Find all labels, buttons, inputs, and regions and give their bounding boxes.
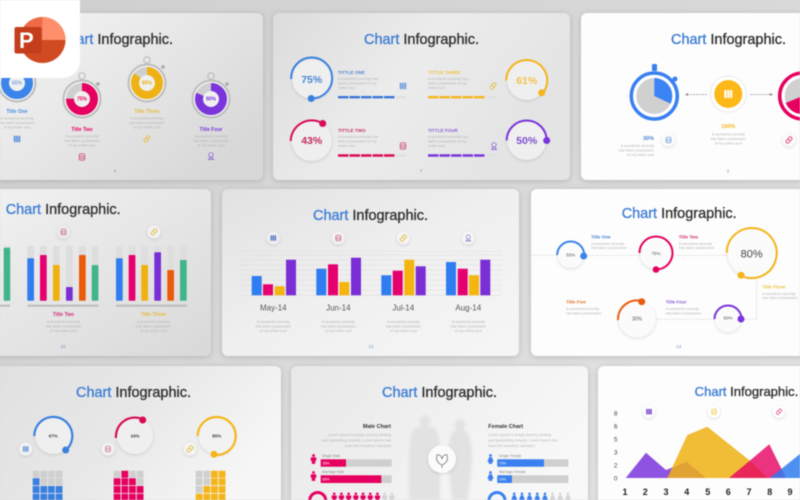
month descriptions: A wonderful serenity <box>257 320 290 324</box>
x axis labels: 5 <box>705 487 710 497</box>
bar group: title two <box>27 246 98 307</box>
ring 43%: 43% <box>301 135 323 147</box>
y axis labels: 2 <box>614 462 618 470</box>
month labels: Jul-14 <box>392 304 415 312</box>
female bars: Single Female <box>499 454 521 458</box>
month descriptions: of my entire soul <box>325 329 352 333</box>
stopwatch: title one <box>0 64 36 142</box>
month descriptions: of my entire soul <box>455 329 482 333</box>
male bottom ring and people row <box>310 492 394 500</box>
caption 100%: has taken possession <box>711 137 746 141</box>
caption 100%: 100% <box>721 124 735 130</box>
item: tittle two <box>338 128 406 156</box>
ring 50% <box>507 120 550 160</box>
month descriptions: A wonderful serenity <box>452 320 485 324</box>
item: tittle one: taken possession of my <box>338 82 377 86</box>
stopwatch: title two: has taken possession <box>64 139 100 143</box>
stopwatch: title three: of my entire soul <box>133 126 161 130</box>
heading: Chart Infographic. <box>382 385 497 401</box>
x axis labels: 3 <box>663 487 669 497</box>
panel: rings and waffle slide <box>0 366 281 500</box>
caption: title two: Title Two <box>53 312 74 318</box>
panel: timeline rings slide <box>531 189 800 356</box>
stopwatch: title two: 75% <box>77 97 88 103</box>
ring 75% <box>291 58 332 102</box>
caption: title two <box>46 312 81 333</box>
y axis labels: 5 <box>614 436 618 444</box>
icon badges <box>643 406 785 418</box>
caption 30%: of my entire soul <box>627 153 654 157</box>
stopwatch: title three: 85% <box>142 81 153 87</box>
x axis labels <box>622 487 793 497</box>
bar group: cut off left <box>0 246 10 307</box>
x axis labels: 1 <box>622 487 628 497</box>
icon: powerpoint logo: P <box>19 28 34 53</box>
stopwatch: title three: Title Three <box>134 109 160 115</box>
month descriptions: has taken possession <box>256 324 291 328</box>
item: tittle four: entire soul <box>428 144 445 148</box>
male bars: Single Male <box>322 454 340 458</box>
ring 50% top <box>557 242 587 268</box>
x axis labels: 8 <box>767 487 772 497</box>
stopwatch: title four: 90% <box>206 97 217 103</box>
ring 30% <box>618 298 656 338</box>
item: tittle two: entire soul <box>338 144 355 148</box>
caption: title two: of my entire soul <box>50 329 77 333</box>
waffle chart yellow <box>196 471 226 500</box>
heading: Chart Infographic. <box>622 206 737 222</box>
bar group: title three <box>116 246 187 307</box>
panel: male female chart slide <box>291 366 588 500</box>
caption 30% <box>619 136 654 157</box>
month descriptions: has taken possession <box>386 324 421 328</box>
female column text <box>488 424 558 448</box>
female bars: 15% <box>499 478 506 482</box>
waffle chart blue <box>33 471 62 500</box>
caption: title three: A wonderful serenity <box>137 320 170 324</box>
label: title one: A wonderful serenity <box>591 242 624 246</box>
ring 67%: 67% <box>49 434 58 439</box>
label: title four: has taken possession <box>666 312 701 316</box>
ring 34% <box>116 416 153 454</box>
x axis labels: 4 <box>684 487 689 497</box>
icon badges <box>19 442 197 456</box>
icon: pencil badge <box>148 226 160 238</box>
waffle chart pink <box>114 471 144 500</box>
male bars: 85% <box>322 478 330 482</box>
x axis labels: 9 <box>787 487 793 497</box>
stopwatch: title one: Title One <box>6 109 28 115</box>
y axis labels: 3 <box>614 450 618 456</box>
item: tittle four: TITTLE FOUR <box>428 128 459 133</box>
male bars: 35% <box>322 462 330 466</box>
male bars <box>311 454 392 483</box>
label: title five <box>566 300 601 316</box>
panel: vertical bars slide <box>0 189 211 356</box>
y axis labels: 0 <box>614 476 618 482</box>
item: tittle one: entire soul <box>338 86 355 90</box>
caption 30%: A wonderful serenity <box>621 144 654 148</box>
item: tittle two: TITTLE TWO <box>338 128 366 133</box>
page number: 14 <box>676 344 682 349</box>
y axis labels <box>614 410 618 482</box>
label: title three: Title Three <box>762 284 786 290</box>
label: title two: has taken possession <box>679 246 714 250</box>
month descriptions: A wonderful serenity <box>322 320 355 324</box>
label: title four: A wonderful serenity <box>666 307 699 311</box>
month descriptions: has taken possession <box>451 324 486 328</box>
stopwatch: title one: has taken possession <box>0 121 35 125</box>
stopwatch: title four: has taken possession <box>193 139 229 143</box>
month labels: Jun-14 <box>326 304 351 312</box>
item: tittle four: taken possession of my <box>428 140 467 144</box>
female bars: Marriage Female <box>499 470 526 474</box>
male column text: been the industry's standard <box>345 444 391 448</box>
stopwatch: title one: A wonderful serenity <box>0 116 34 120</box>
stopwatch: title two <box>64 73 100 160</box>
caption: title two: has taken possession <box>46 324 81 328</box>
label: title one: Title One <box>591 234 611 240</box>
panel: progress rings slide <box>273 13 570 180</box>
center badge <box>428 445 456 473</box>
ring 30%: 30% <box>632 316 643 322</box>
icon: pencil <box>782 134 796 146</box>
item: tittle four <box>428 128 497 156</box>
label: title three: A wonderful serenity <box>762 292 796 296</box>
caption: title three: Title Three <box>141 312 166 318</box>
page number: 7 <box>420 168 423 174</box>
stopwatch: title two: A wonderful serenity <box>65 134 99 138</box>
label: title four: Title Four <box>666 300 687 304</box>
month labels: May-14 <box>260 304 287 312</box>
heading: Chart Infographic. <box>671 32 786 48</box>
stopwatch: title two: Title Two <box>71 127 93 133</box>
month labels: Aug-14 <box>455 304 482 312</box>
label: title five: A wonderful serenity <box>566 307 599 311</box>
icon: database <box>662 134 675 146</box>
item: tittle three <box>428 70 497 97</box>
ring 34%: 34% <box>130 434 140 439</box>
ring 43% <box>291 120 332 161</box>
label: title five: has taken possession <box>566 312 601 316</box>
ring 85%: 85% <box>212 434 221 439</box>
month descriptions: of my entire soul <box>260 329 287 333</box>
male column text: Lorem Ipsum is simply dummy printing <box>328 433 391 437</box>
caption: title two: A wonderful serenity <box>47 320 80 324</box>
female bars: 70% <box>499 462 506 466</box>
stopwatch: title three: A wonderful serenity <box>130 116 164 120</box>
caption 100%: of my entire soul <box>715 142 742 146</box>
heading: Chart Infographic. <box>313 208 428 224</box>
caption: title three <box>136 312 171 333</box>
ring 50% bottom: 50% <box>723 316 733 320</box>
item: tittle two: A wonderful serenity has <box>338 135 378 139</box>
ring 67% <box>34 417 72 454</box>
ring 75% <box>640 237 672 273</box>
ring 61% <box>506 60 547 100</box>
stopwatch: title one: of my entire soul <box>3 126 31 130</box>
item: tittle three: taken possession of my <box>428 82 467 86</box>
label: title five: Title Five <box>566 300 586 304</box>
label: title three: has taken possession <box>762 296 798 300</box>
ring 80% <box>727 228 777 279</box>
x axis labels: 2 <box>643 487 648 497</box>
y axis labels: 8 <box>614 410 618 418</box>
panel: monthly bar chart slide <box>222 189 519 356</box>
x axis labels: 7 <box>746 487 752 497</box>
panel: timer pie slide <box>581 13 800 180</box>
silhouettes of man and woman <box>409 416 472 500</box>
label: title one: has taken possession <box>591 246 626 250</box>
heading: Chart Infographic. <box>364 32 479 48</box>
female column text: and typesetting industry. Lorem Ipsum has <box>488 438 558 442</box>
caption 30%: 30% <box>643 136 654 142</box>
center dial 100% <box>710 76 746 112</box>
heading: Chart Infographic. <box>695 384 798 399</box>
icon badges <box>267 232 475 244</box>
female bars <box>487 454 568 483</box>
stopwatch: title four: A wonderful serenity <box>194 134 228 138</box>
item: tittle three: entire soul <box>428 86 445 90</box>
month descriptions: A wonderful serenity <box>387 320 420 324</box>
page number: 12 <box>368 344 374 349</box>
heading: Chart Infographic. <box>6 202 121 218</box>
dashed arrow left <box>685 93 708 96</box>
dashed arrow right <box>750 93 773 96</box>
y axis labels: 6 <box>614 424 618 430</box>
female column text: Female Chart <box>488 424 523 430</box>
page number: 10 <box>60 344 66 349</box>
stopwatch: title three: has taken possession <box>129 121 165 125</box>
item: tittle three: TITTLE THREE <box>428 70 460 75</box>
item: tittle one: TITTLE ONE <box>338 70 365 75</box>
stopwatch: title one: 65% <box>12 81 23 87</box>
month labels <box>260 304 482 312</box>
icon: database badge <box>57 226 70 238</box>
male bars: Marriage Male <box>322 470 344 474</box>
caption: title three: has taken possession <box>136 324 171 328</box>
male column text <box>322 424 391 448</box>
item: tittle two: taken possession of my <box>338 140 377 144</box>
connector lines <box>531 255 757 319</box>
area chart <box>626 427 800 478</box>
female bottom ring and people row <box>489 492 571 500</box>
caption 100% <box>711 124 746 146</box>
male column text: and typesetting industry. Lorem Ipsum has <box>322 438 391 442</box>
item: tittle four: A wonderful serenity has <box>428 135 468 139</box>
timer: pink <box>780 73 800 119</box>
caption: title three: of my entire soul <box>140 329 167 333</box>
item: tittle one <box>338 70 406 97</box>
item: tittle one: A wonderful serenity has <box>338 77 378 81</box>
ring 75%: 75% <box>301 74 323 86</box>
x axis labels: 6 <box>726 487 731 497</box>
month descriptions <box>256 320 486 333</box>
month descriptions: of my entire soul <box>390 329 417 333</box>
male column text: Male Chart <box>363 424 391 430</box>
page number: 2 <box>727 168 730 174</box>
stopwatch: title three <box>128 57 166 143</box>
heading: Chart Infographic. <box>58 32 173 48</box>
ring 50%: 50% <box>516 135 538 147</box>
label: title two <box>679 234 714 250</box>
label: title one <box>591 234 626 250</box>
female column text: been the industry's standard <box>488 444 535 448</box>
bar chart <box>240 252 502 295</box>
ring 50% top: 50% <box>566 252 575 258</box>
ring 85% <box>198 417 236 458</box>
caption 100%: A wonderful serenity <box>712 132 745 136</box>
label: title two: Title Two <box>679 234 698 240</box>
timer: blue 30% <box>631 64 678 119</box>
item: tittle three: A wonderful serenity has <box>428 77 468 81</box>
month descriptions: has taken possession <box>321 324 356 328</box>
ring 80%: 80% <box>741 248 763 260</box>
panel: stopwatch slide <box>0 13 263 180</box>
stopwatch: title four: of my entire soul <box>197 144 225 148</box>
stopwatch: title two: of my entire soul <box>68 144 96 148</box>
caption 30%: has taken possession <box>619 148 654 152</box>
page number: 4 <box>114 168 117 174</box>
ring 61%: 61% <box>516 75 538 87</box>
powerpoint logo badge <box>0 0 80 78</box>
stopwatch: title four: Title Four <box>200 127 222 133</box>
panel: area chart slide <box>598 366 800 500</box>
label: title two: A wonderful serenity <box>679 242 712 246</box>
label: title four <box>666 300 701 316</box>
label: title three <box>762 284 798 300</box>
stopwatch: title four <box>192 73 230 159</box>
ring 75%: 75% <box>651 251 661 256</box>
ring 50% bottom <box>714 306 744 332</box>
heading: Chart Infographic. <box>76 385 191 401</box>
female column text: Lorem Ipsum is simply dummy printing <box>488 433 551 437</box>
